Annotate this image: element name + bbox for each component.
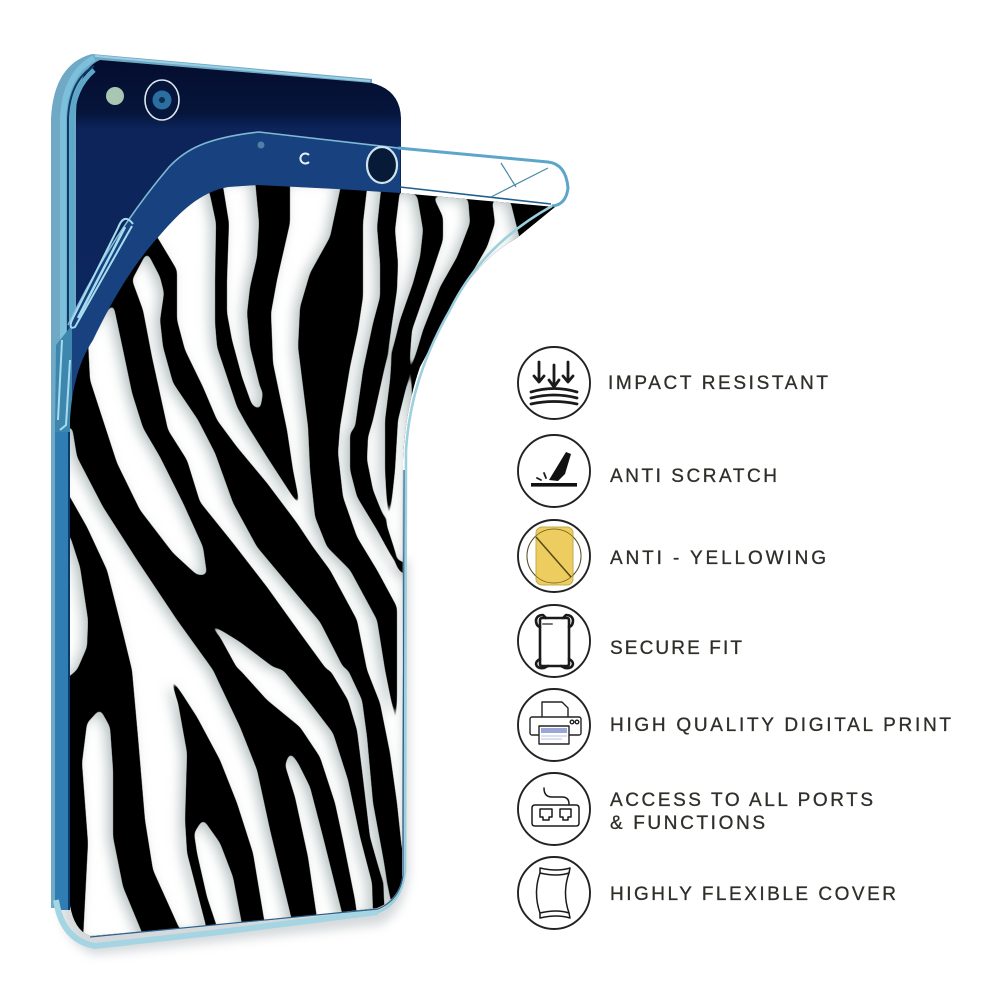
stripe d [222, 180, 263, 410]
icon: blade scratching surface [518, 435, 590, 507]
case camera cutout [367, 147, 397, 183]
feature: impact resistant [518, 347, 828, 419]
icon: impact arrows [518, 347, 590, 419]
label: ANTI SCRATCH [610, 466, 777, 487]
stripe e [338, 190, 403, 784]
stripe h [66, 427, 293, 930]
stripe c [150, 180, 410, 860]
stripe l [286, 756, 342, 914]
feature: anti scratch [518, 435, 777, 507]
stripe m [70, 538, 88, 676]
label: ANTI - YELLOWING [610, 548, 826, 569]
case band over phone [68, 132, 400, 450]
case microphone dot [258, 142, 264, 148]
drop shadow [60, 560, 409, 955]
icon: printer [518, 689, 590, 761]
label 2 lines [610, 790, 873, 834]
stripe f [367, 190, 470, 565]
transparent case top over white [398, 148, 568, 206]
label: IMPACT RESISTANT [608, 373, 828, 394]
rear camera [145, 80, 179, 120]
zebra print [60, 170, 570, 950]
phone frame detail [55, 56, 370, 910]
stripe g [470, 202, 519, 278]
label: SECURE FIT [610, 638, 742, 659]
stripe j [82, 709, 145, 940]
feature: highly flexible cover [518, 857, 896, 929]
case outline right and bottom [56, 206, 552, 946]
icon: yellow case crossed [518, 520, 590, 592]
phone back [76, 60, 401, 440]
side button cutout on case [58, 219, 133, 430]
phone side frame [51, 54, 372, 908]
case flash hole [300, 154, 309, 164]
phone and case illustration [51, 54, 570, 955]
feature: secure fit [518, 605, 742, 677]
label: HIGH QUALITY DIGITAL PRINT [610, 715, 951, 736]
label 2 lines: & FUNCTIONS [610, 813, 765, 834]
label: HIGHLY FLEXIBLE COVER [610, 884, 896, 905]
case rim [68, 132, 398, 325]
label 2 lines: ACCESS TO ALL PORTS [610, 790, 873, 811]
stripe b [132, 252, 395, 915]
stripe k [194, 819, 243, 930]
icon: flexible cover [518, 857, 590, 929]
feature: high quality digital print [518, 689, 951, 761]
transparent lower-left case edge [55, 325, 72, 432]
feature: access to all ports and functions [518, 773, 873, 845]
stripe i [206, 621, 373, 915]
feature: anti yellowing [518, 520, 826, 592]
stripe a [88, 303, 207, 575]
icon: case with bumpers [518, 605, 590, 677]
rear flash [106, 87, 124, 105]
icon: ports [518, 773, 590, 845]
